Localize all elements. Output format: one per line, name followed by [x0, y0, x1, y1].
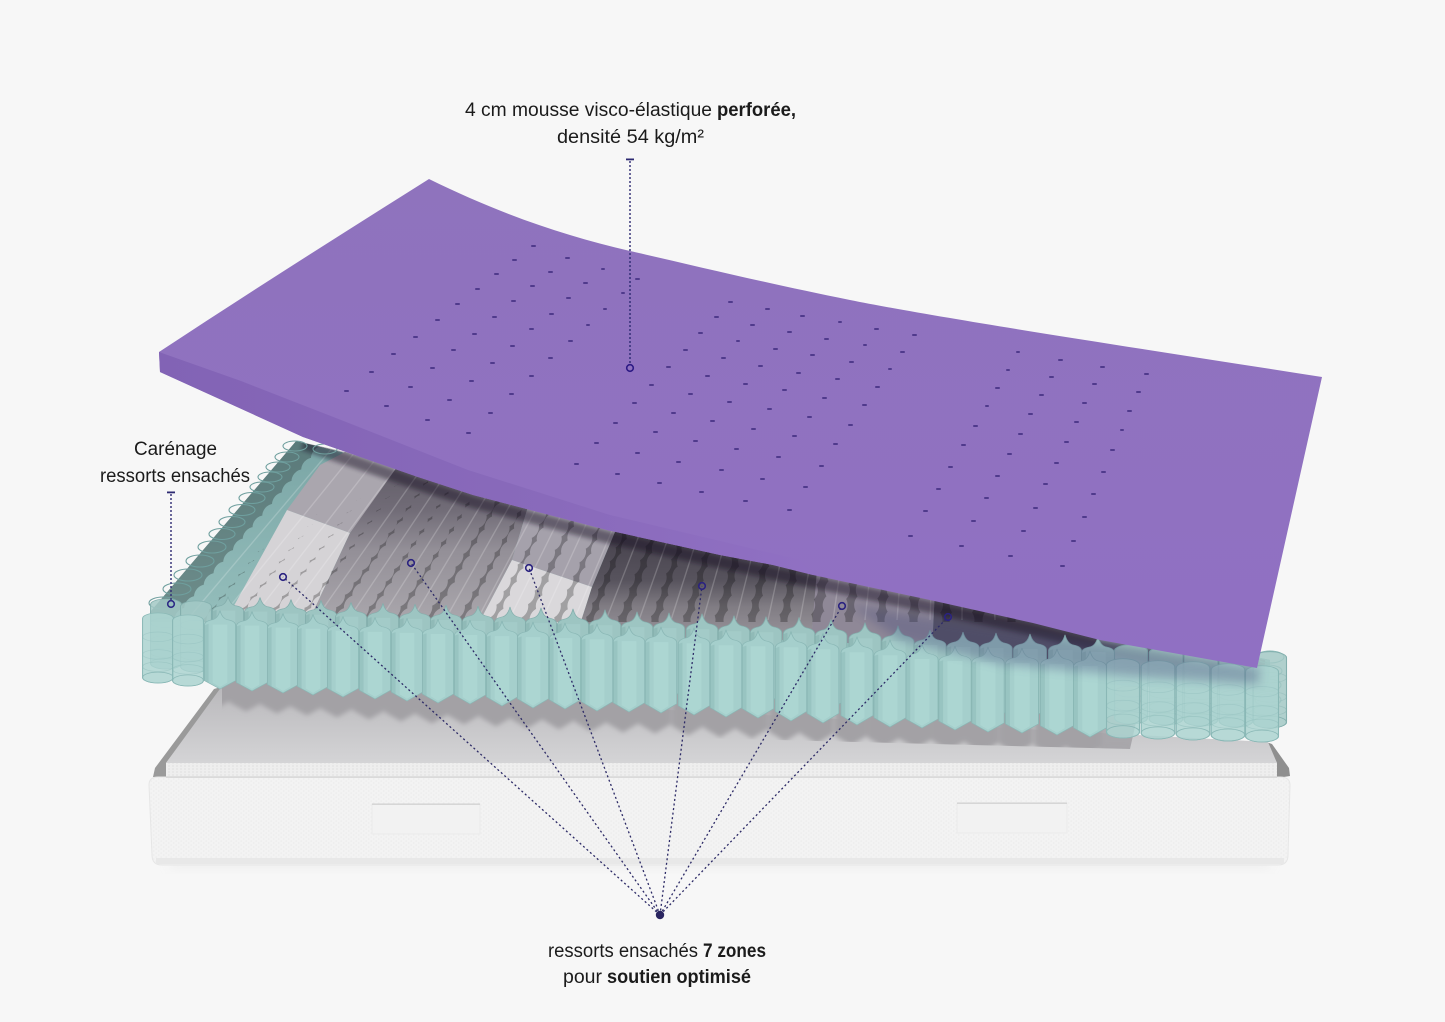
right handle: [957, 802, 1067, 833]
foam callout leader: [626, 158, 634, 371]
mattress base: [137, 631, 1290, 868]
shadow under foam: [303, 444, 1257, 675]
label: foam: 4 cm mousse visco-élastique: [465, 100, 712, 121]
left handle: [372, 804, 480, 834]
cover bottom seam: [156, 858, 1284, 864]
teal second row: [151, 597, 1286, 728]
foam shadow on springs: [850, 605, 1260, 684]
label: foam: [465, 100, 796, 148]
label: casing: [100, 439, 250, 487]
memory foam layer: [159, 179, 1322, 668]
teal front row of springs: [143, 611, 1278, 742]
spring caps: [186, 446, 1152, 662]
label: zones: [548, 941, 766, 988]
foam perforations: [345, 246, 1148, 566]
label: zones: pour: [563, 967, 603, 988]
casing callout leader: [167, 492, 175, 607]
foam side edge: [159, 352, 813, 575]
seven zone callout leaders: [280, 560, 951, 919]
base inner frame right: [1266, 742, 1290, 778]
label: casing: Carénage: [134, 439, 217, 460]
left edge spring coils: [149, 441, 337, 609]
spring column spines: [202, 450, 996, 620]
label: foam: densité 54 kg/m²: [557, 127, 704, 148]
base inner frame left: [153, 686, 224, 777]
label: casing: ressorts ensachés: [100, 466, 250, 487]
label: foam: perforée,: [717, 100, 796, 121]
label: zones: ressorts ensachés: [548, 941, 698, 962]
dim gaps between spring columns: [150, 442, 1016, 622]
label: zones: soutien optimisé: [607, 967, 751, 988]
spring top surface: [150, 420, 1270, 690]
spring core: [143, 420, 1286, 742]
right end coil springs: [1254, 651, 1284, 706]
base ground shadow: [170, 862, 1270, 868]
spring shadow on foam: [222, 680, 1140, 749]
white foam edge: [166, 763, 1277, 778]
base grey foam top: [166, 686, 1277, 763]
base cover: [149, 777, 1290, 865]
foam top surface: [159, 179, 1322, 668]
cover top seam: [166, 776, 1277, 778]
label: zones: 7 zones: [703, 941, 766, 962]
callout lines: [167, 158, 951, 919]
